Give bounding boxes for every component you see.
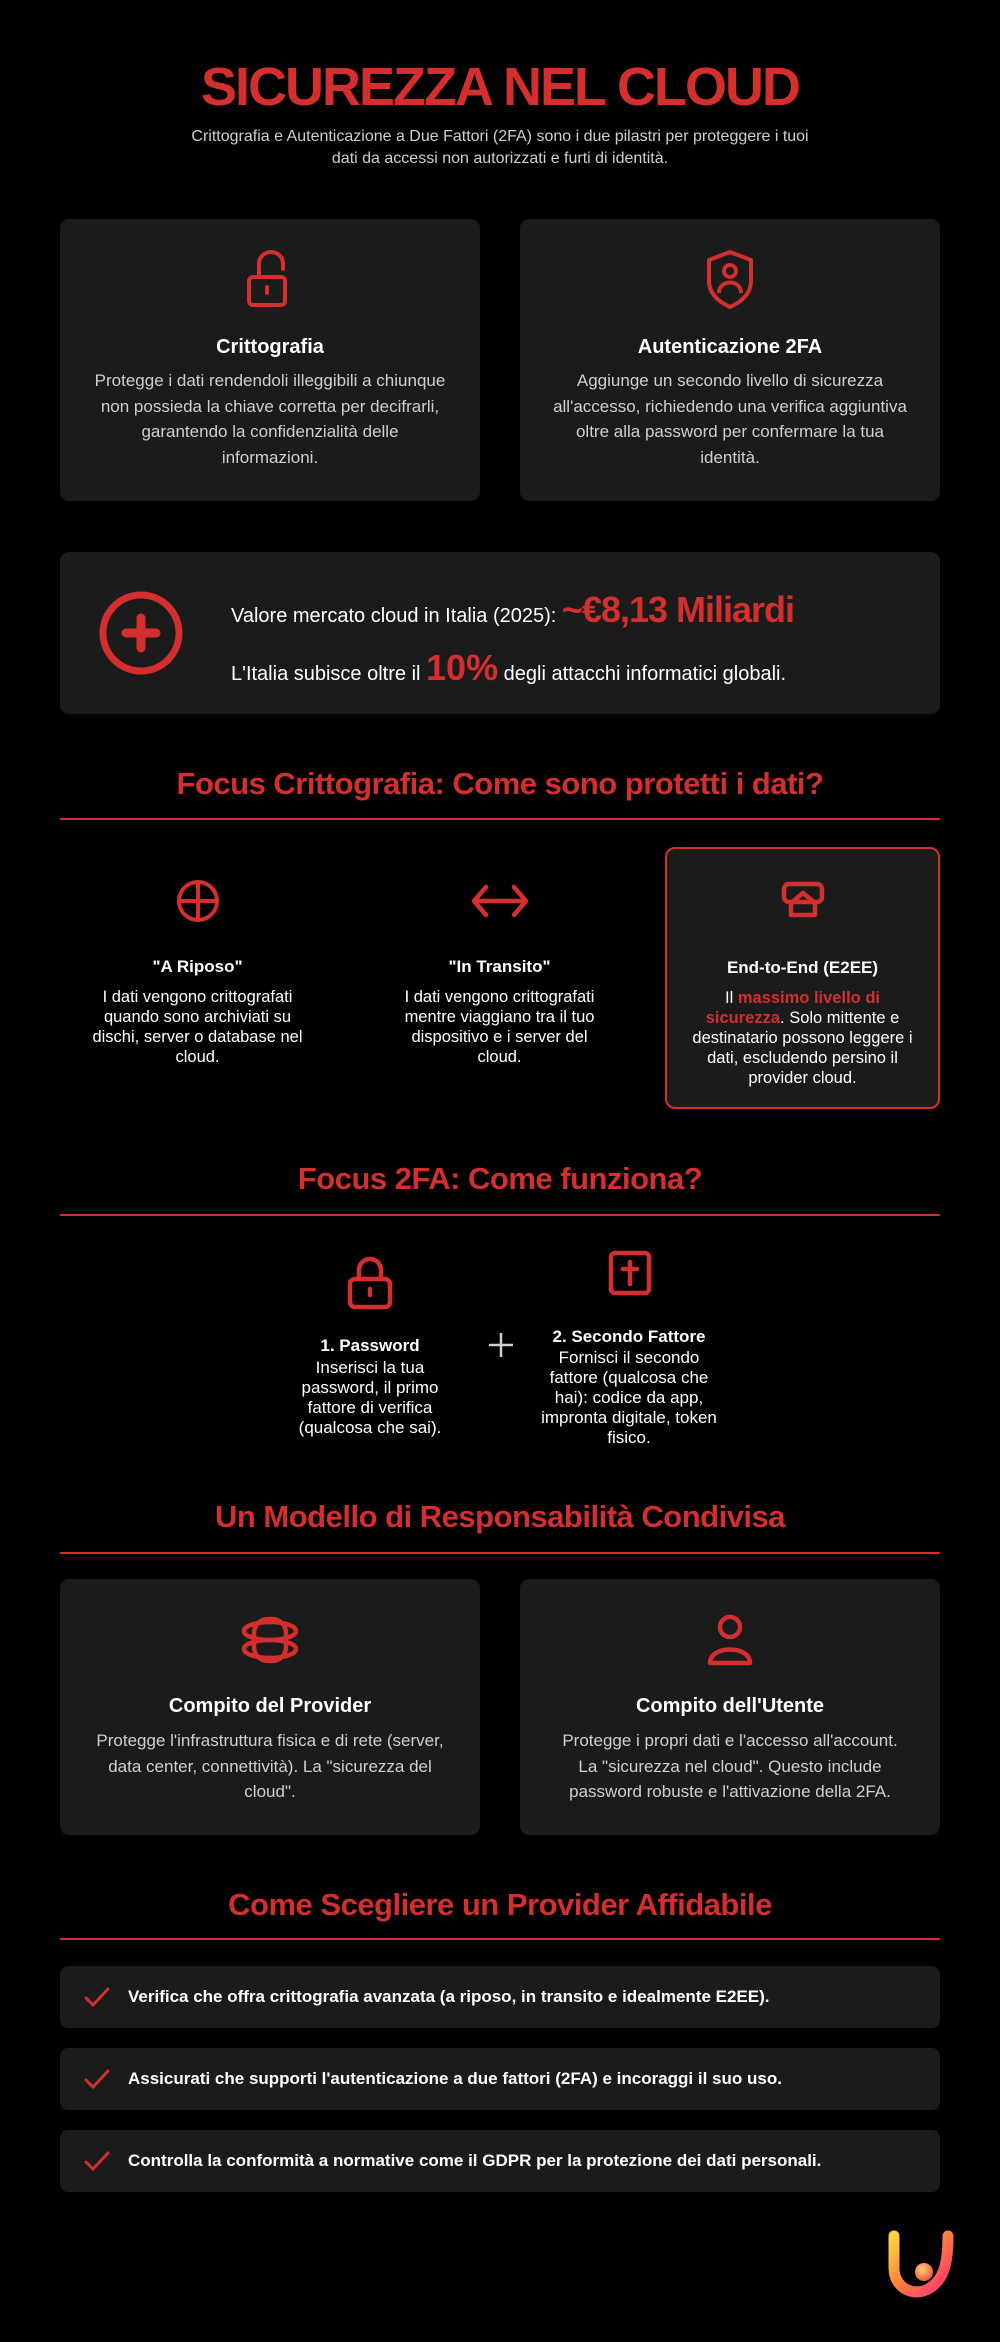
heading: Compito del Provider xyxy=(169,1695,371,1717)
icon: open lock xyxy=(247,250,287,307)
checklist item 2 xyxy=(60,2048,940,2110)
text xyxy=(405,988,594,1066)
text: dischi, server o database nel xyxy=(92,1028,303,1046)
icon: stacked servers xyxy=(242,1616,298,1664)
checklist item 2: Assicurati che supporti l'autenticazione a due fattori (2FA) e incoraggi il suo uso. xyxy=(128,2069,782,2088)
text: fattore di verifica xyxy=(308,1398,432,1417)
text: Protegge i propri dati e l'accesso all'account. xyxy=(562,1731,898,1750)
text xyxy=(92,988,303,1066)
text: fisico. xyxy=(607,1428,651,1447)
icon: shield user xyxy=(707,250,753,309)
text xyxy=(553,371,907,466)
text: oltre alla password per confermare la tua xyxy=(576,422,884,441)
logo xyxy=(888,2230,954,2298)
text xyxy=(692,989,913,1087)
text: cloud. xyxy=(175,1048,220,1066)
panel: end-to-end highlighted xyxy=(665,847,940,1109)
text: data center, connettività). La "sicurezza del xyxy=(108,1756,432,1776)
text: I dati vengono crittografati xyxy=(103,988,292,1006)
panel: utente xyxy=(520,1579,940,1835)
text: dati, escludendo persino il xyxy=(707,1049,898,1067)
panel: provider xyxy=(60,1579,480,1835)
text: identità. xyxy=(700,448,760,466)
column: a riposo xyxy=(92,880,303,1066)
heading: Crittografia xyxy=(216,336,324,358)
icon: globe cross xyxy=(177,880,219,922)
icon: circle plus xyxy=(100,592,182,674)
heading: "A Riposo" xyxy=(152,957,243,976)
text: sicurezza. Solo mittente e xyxy=(706,1009,899,1027)
text: quando sono archiviati su xyxy=(104,1008,291,1026)
heading: responsabilità: Un Modello di Responsabilità Condivisa xyxy=(215,1499,785,1534)
icon: inbox xyxy=(782,882,824,918)
heading: Autenticazione 2FA xyxy=(638,336,822,358)
stat: attacks: L'Italia subisce oltre il 10% degli attacchi informatici globali. xyxy=(231,647,786,688)
text: impronta digitale, token xyxy=(541,1408,717,1427)
step: password xyxy=(299,1256,441,1437)
text: fattore (qualcosa che xyxy=(550,1368,708,1387)
heading: 1. Password xyxy=(320,1336,420,1355)
text: Protegge l'infrastruttura fisica e di rete (server, xyxy=(96,1731,444,1750)
text: all'accesso, richiedendo una verifica aggiuntiva xyxy=(553,396,907,416)
heading: come scegliere: Come Scegliere un Provider Affidabile xyxy=(228,1887,772,1922)
text: garantendo la confidenzialità delle xyxy=(141,422,399,441)
icon: lock xyxy=(348,1256,392,1310)
text: Fornisci il secondo xyxy=(559,1348,699,1367)
text xyxy=(96,1731,444,1801)
subtitle xyxy=(191,128,809,167)
checklist item 3: Controlla la conformità a normative come il GDPR per la protezione dei dati personali. xyxy=(128,2151,821,2170)
icon: double arrow xyxy=(472,884,528,918)
heading: End-to-End (E2EE) xyxy=(727,958,878,977)
text: I dati vengono crittografati xyxy=(405,988,594,1006)
text: (qualcosa che sai). xyxy=(299,1418,441,1437)
text: password, il primo xyxy=(302,1378,438,1397)
text: cloud". xyxy=(244,1782,296,1801)
heading: "In Transito" xyxy=(448,957,551,976)
checklist item 1: Verifica che offra crittografia avanzata (a riposo, in transito e idealmente E2EE). xyxy=(128,1987,769,2006)
heading: focus crittografia: Focus Crittografia: Come sono protetti i dati? xyxy=(177,766,823,801)
panel: 2FA xyxy=(520,219,940,501)
text xyxy=(541,1348,717,1447)
heading: 2. Secondo Fattore xyxy=(552,1327,706,1346)
panel: crittografia xyxy=(60,219,480,501)
subtitle: dati da accessi non autorizzati e furti di identità. xyxy=(332,150,668,167)
text: Protegge i dati rendendoli illeggibili a chiunque xyxy=(95,371,445,390)
text: provider cloud. xyxy=(748,1069,857,1087)
text: Il massimo livello di xyxy=(725,989,880,1007)
text: cloud. xyxy=(477,1048,522,1066)
text: non possieda la chiave corretta per decifrarli, xyxy=(101,396,439,416)
text: mentre viaggiano tra il tuo xyxy=(405,1008,594,1026)
text xyxy=(95,371,445,466)
checklist item 3 xyxy=(60,2130,940,2192)
heading: focus 2FA: Focus 2FA: Come funziona? xyxy=(298,1161,702,1196)
icon: user xyxy=(708,1614,752,1666)
text: La "sicurezza nel cloud". Questo include xyxy=(578,1756,882,1776)
text: Inserisci la tua xyxy=(316,1358,424,1377)
title: SICUREZZA NEL CLOUD xyxy=(201,57,799,117)
checklist item 1 xyxy=(60,1966,940,2028)
text: hai): codice da app, xyxy=(555,1388,703,1407)
text: dispositivo e i server del xyxy=(411,1028,588,1046)
text xyxy=(299,1358,441,1437)
text: destinatario possono leggere i xyxy=(692,1029,913,1047)
subtitle: Crittografia e Autenticazione a Due Fattori (2FA) sono i due pilastri per proteggere i tuoi xyxy=(191,128,809,145)
text: Aggiunge un secondo livello di sicurezza xyxy=(577,371,883,390)
panel: stats xyxy=(60,552,940,714)
text xyxy=(562,1731,898,1801)
column: in transito xyxy=(405,884,594,1066)
step: secondo fattore xyxy=(541,1250,717,1447)
icon: plus xyxy=(489,1333,513,1357)
stat: market value: Valore mercato cloud in Italia (2025): ~€8,13 Miliardi xyxy=(231,589,794,630)
text: informazioni. xyxy=(222,448,318,466)
icon: device xyxy=(608,1250,652,1296)
text: password robuste e l'attivazione della 2FA. xyxy=(569,1782,891,1801)
heading: Compito dell'Utente xyxy=(636,1695,824,1717)
